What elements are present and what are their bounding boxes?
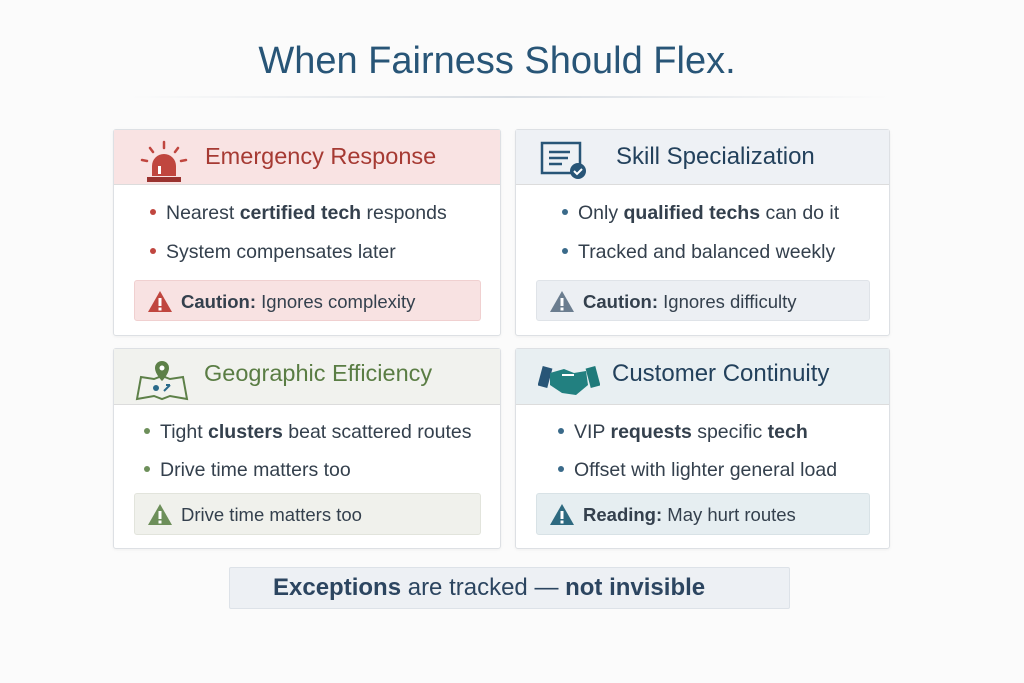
panel: skill specialization: Skill Specialization [616,143,815,170]
icon: certificate [540,142,586,179]
panel: emergency response: System compensates later [166,241,396,263]
bullets: Nearest certified tech responds [166,202,447,224]
panel: skill specialization: Tracked and balanced weekly [578,241,835,263]
panel: emergency response: Emergency Response [205,143,436,169]
caution box: Caution: Ignores complexity [181,291,415,312]
panel: customer continuity: Offset with lighter general load [574,459,837,481]
panel: customer continuity: Customer Continuity [612,360,829,387]
panel: skill specialization [515,129,890,336]
caution box [134,493,481,535]
panel: geographic efficiency [113,348,501,549]
panel: emergency response [113,129,501,336]
panel: customer continuity: VIP requests specific tech [574,421,808,443]
panel: geographic efficiency: Geographic Efficiency [204,360,432,386]
caution box: Drive time matters too [181,504,362,525]
caution box: Reading: May hurt routes [583,504,796,525]
title: When Fairness Should Flex. [258,40,736,82]
panel: geographic efficiency: Drive time matters too [160,459,351,481]
icon: map pin [136,361,188,400]
caution box [536,493,870,535]
panel: skill specialization: Only qualified techs can do it [578,202,839,224]
footer callout [229,567,790,609]
header: emergency [114,130,500,185]
caution box [536,280,870,321]
panel: customer continuity [515,348,890,549]
caution box: Caution: Ignores difficulty [583,291,796,312]
footer callout: Exceptions are tracked — not invisible [273,574,705,601]
icon: handshake [538,366,600,395]
panel: geographic efficiency: Tight clusters beat scattered routes [160,421,471,443]
icon: siren [140,140,188,182]
caution box [134,280,481,321]
